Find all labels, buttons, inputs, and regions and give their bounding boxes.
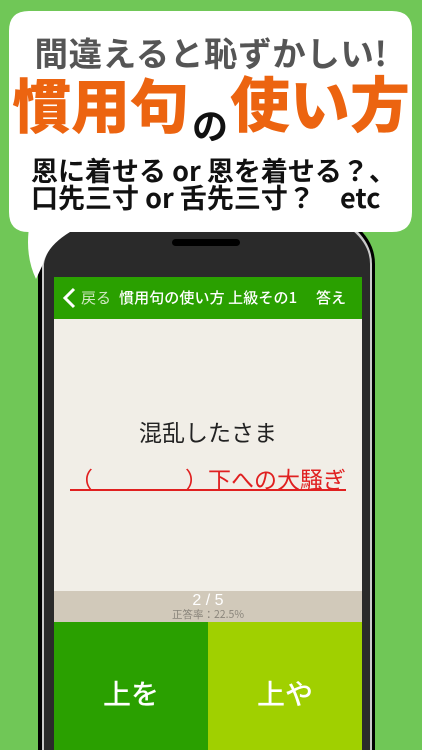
- red fill-in sentence: （ ）下への大騒ぎ: [70, 461, 346, 495]
- app screen: [54, 277, 362, 750]
- question text: 混乱したさま: [139, 414, 277, 448]
- left answer text: 上を: [103, 673, 159, 713]
- title particle: の: [192, 98, 228, 150]
- back label: 戻る: [81, 287, 111, 308]
- speech bubble: [9, 11, 412, 279]
- progress bar: [54, 591, 362, 622]
- back chevron icon: [63, 288, 75, 308]
- title part two: 使い方: [230, 58, 410, 145]
- header title: 慣用句の使い方 上級その1: [119, 287, 297, 308]
- title part one: 慣用句: [12, 60, 189, 145]
- right answer text: 上や: [257, 673, 313, 713]
- app header bar: [54, 277, 362, 319]
- answer button left: [54, 622, 208, 750]
- examples line two: 口先三寸 or 舌先三寸？: [31, 177, 315, 216]
- examples line one: 恩に着せる or 恩を着せる？、: [31, 150, 396, 189]
- bubble shape with tail: [9, 11, 412, 279]
- correct rate: 正答率：22.5%: [172, 607, 244, 622]
- subtitle: 間違えると恥ずかしい!: [34, 27, 388, 76]
- main title: [12, 58, 410, 150]
- answer button label: 答え: [316, 287, 346, 308]
- progress count: 2 / 5: [192, 592, 224, 609]
- examples line two: etc: [340, 177, 380, 216]
- answer button right: [208, 622, 362, 750]
